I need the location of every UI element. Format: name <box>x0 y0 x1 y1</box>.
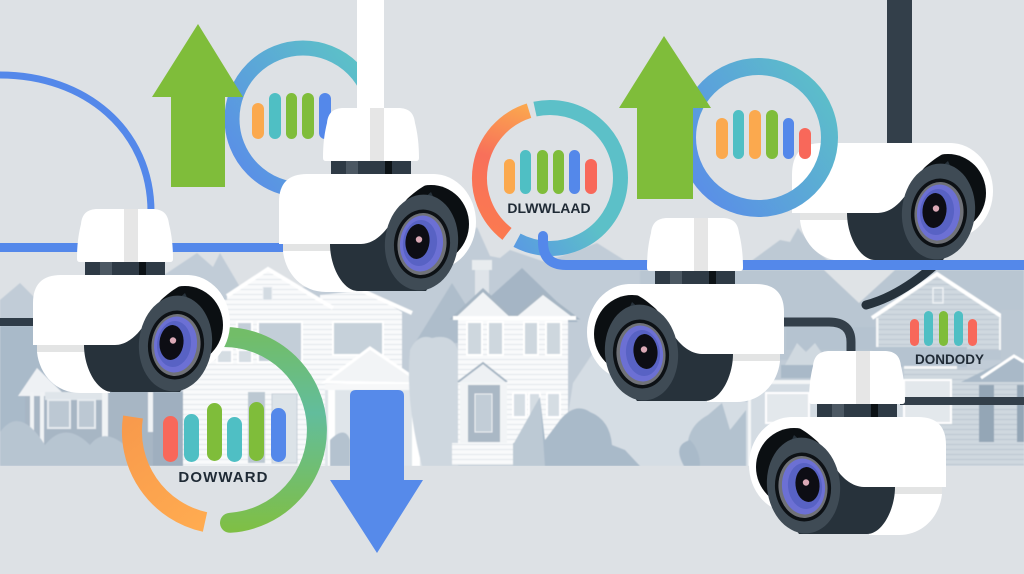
dark cable: camera link <box>780 322 851 352</box>
ring chart: DLWWLAAD <box>479 107 620 248</box>
scenery: center house <box>452 260 576 465</box>
dark cable: right upper <box>866 264 936 305</box>
blue cable: center to right <box>543 236 1024 265</box>
scenery: right trees <box>513 347 750 466</box>
ring chart: top left <box>232 48 374 190</box>
bar chart: DONDODY <box>910 311 984 367</box>
ground <box>0 466 1024 574</box>
blue cable: left horizontal <box>0 243 290 252</box>
camera: center right <box>587 218 784 404</box>
arrow: green up left <box>152 24 243 187</box>
blue cable: top left arc <box>0 75 151 212</box>
camera: top center <box>279 108 476 294</box>
ring chart: DOWWARD: DOWWARD <box>178 469 269 486</box>
dark cable: right <box>900 397 1024 405</box>
camera: top right <box>792 0 1024 270</box>
scenery: large white house <box>183 268 423 466</box>
dark cable: left <box>0 318 36 326</box>
scenery: left house and bushes <box>0 368 183 466</box>
scenery: right houses <box>748 274 1024 466</box>
scenery: pale tree <box>409 337 458 466</box>
scenery: distant mountains <box>0 227 1024 466</box>
ring chart: DOWWARD <box>132 337 317 523</box>
ring chart: DLWWLAAD: DLWWLAAD <box>507 200 591 216</box>
arrow: green up right <box>619 36 711 199</box>
ring chart: top right <box>688 66 830 208</box>
scenery <box>0 227 1024 466</box>
arrow: blue down <box>330 390 423 553</box>
camera: left <box>33 209 230 395</box>
camera: bottom right <box>749 351 946 537</box>
bar chart: DONDODY: DONDODY <box>915 352 984 367</box>
white pole <box>357 0 384 112</box>
